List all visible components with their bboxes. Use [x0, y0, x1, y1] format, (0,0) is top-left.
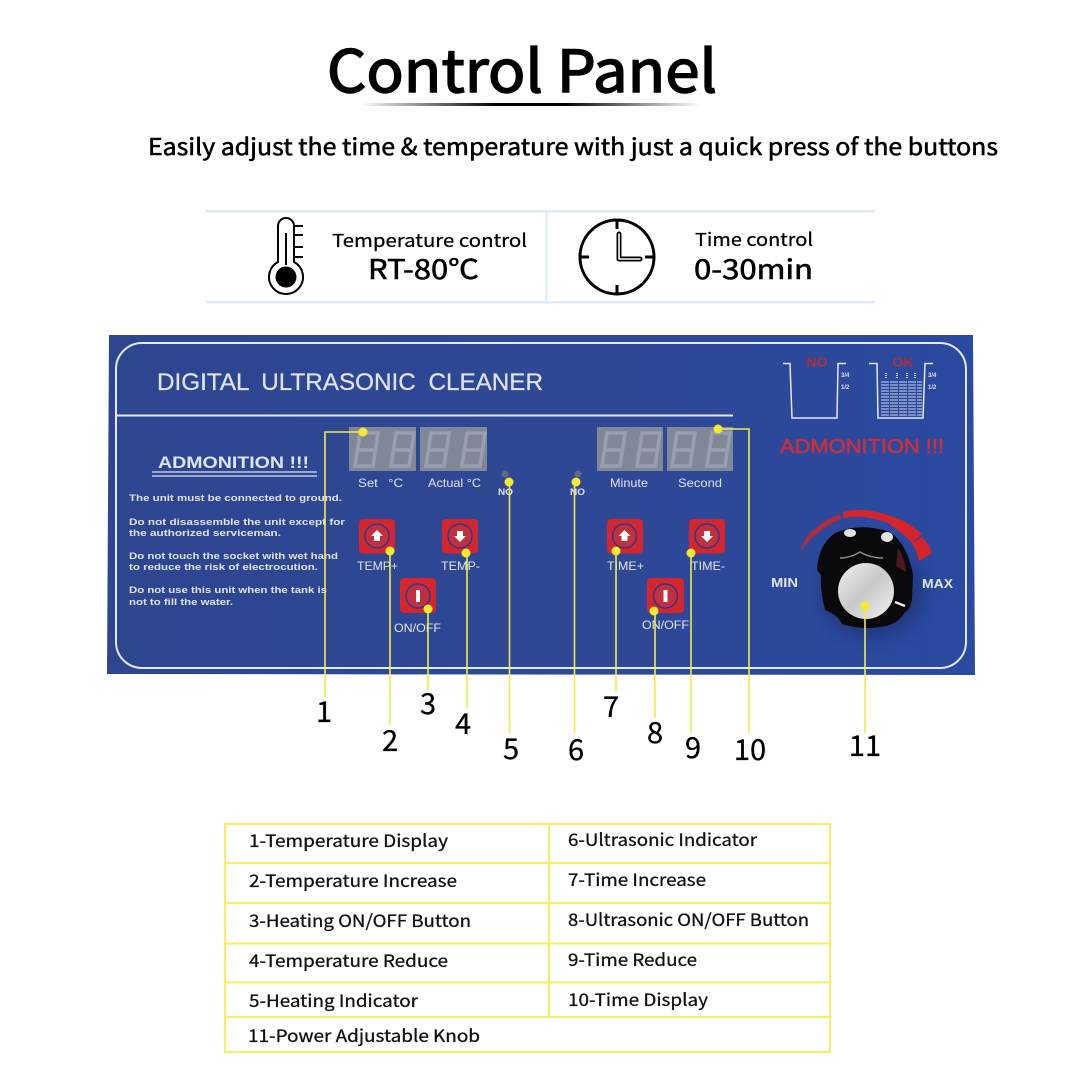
legend: left column: 1-Temperature Display [249, 827, 448, 852]
callout numbers: 4 [455, 701, 471, 743]
legend: left column: 11-Power Adjustable Knob [248, 1022, 480, 1047]
button: temp down [441, 519, 480, 573]
callout numbers: 10 [734, 727, 766, 769]
button: time up [607, 519, 644, 573]
subtitle: Easily adjust the time & temperature with just a quick press of the buttons [148, 128, 998, 162]
callout leader lines [325, 424, 870, 733]
ultrasonic indicator [570, 470, 585, 497]
legend: left column: 5-Heating Indicator [249, 987, 418, 1012]
legend table [225, 824, 830, 1052]
button: temp up: TEMP+ [357, 559, 398, 573]
legend: right column: 6-Ultrasonic Indicator [568, 826, 757, 851]
time display [597, 427, 733, 490]
legend: right column: 7-Time Increase [568, 866, 706, 891]
callout numbers: 3 [420, 681, 436, 723]
button: temp down: TEMP- [441, 559, 480, 573]
legend: left column: 2-Temperature Increase [249, 867, 457, 892]
power knob: MAX [922, 577, 954, 591]
legend: right column: 10-Time Display [568, 986, 708, 1011]
legend: left column [248, 827, 480, 1047]
power scale arc [800, 510, 932, 561]
admonition block: Do not disassemble the unit except for [129, 517, 345, 528]
legend: right column: 9-Time Reduce [568, 946, 697, 971]
time display: Second [678, 476, 722, 490]
legend: left column: 3-Heating ON/OFF Button [249, 907, 471, 932]
time display: Minute [610, 476, 648, 490]
heating indicator [498, 470, 513, 497]
callout numbers: 2 [382, 718, 398, 760]
callout numbers: 9 [685, 725, 701, 767]
admonition block: The unit must be connected to ground. [129, 493, 342, 504]
icon: tank no: 1/2 [841, 385, 850, 391]
power knob: MIN [771, 576, 798, 590]
temperature display: Actual °C [428, 476, 481, 490]
legend: right column [568, 826, 809, 1011]
admonition block: ADMONITION !!! [158, 453, 309, 472]
icon: tank no [783, 354, 850, 418]
text: temperature control [332, 227, 527, 287]
admonition block: to reduce the risk of electrocution. [129, 562, 318, 573]
temperature display: Set °C [358, 476, 403, 490]
title underline [360, 103, 700, 106]
title: Control Panel [327, 25, 717, 109]
admonition block: the authorized serviceman. [129, 528, 281, 539]
icon: tank ok: OK [892, 354, 914, 370]
button: heating on/off [394, 578, 441, 635]
legend: right column: 8-Ultrasonic ON/OFF Button [568, 906, 809, 931]
text: time control [694, 226, 813, 287]
icon: tank ok [869, 354, 937, 418]
icon: tank ok: 1/2 [928, 385, 937, 391]
button: temp up [357, 519, 398, 573]
knob shadow [820, 546, 924, 638]
callout numbers: 8 [647, 710, 663, 752]
callout numbers: 7 [603, 684, 619, 726]
button: ultrasonic on/off [642, 578, 689, 632]
callout numbers [316, 681, 881, 769]
text: time control: 0-30min [694, 248, 813, 287]
admonition block: Do not use this unit when the tank is [129, 585, 327, 596]
admonition block: Do not touch the socket with wet hand [129, 551, 338, 562]
panel: control panel photo [107, 335, 975, 675]
icon: tank no: 3/4 [841, 373, 850, 379]
button: time up: TIME+ [607, 559, 644, 573]
power knob [771, 510, 954, 638]
admonition block: not to fill the water. [129, 597, 233, 608]
text: temperature control: Temperature control [332, 227, 527, 253]
panel heading: DIGITAL ULTRASONIC CLEANER [157, 369, 543, 396]
legend: left column: 4-Temperature Reduce [249, 947, 448, 972]
button: time down [689, 519, 725, 573]
knob body [817, 527, 913, 628]
icon: tank no: NO [806, 354, 828, 370]
icon: tank ok: 3/4 [928, 373, 937, 379]
callout numbers: 6 [568, 727, 584, 769]
button: heating on/off: ON/OFF [394, 621, 441, 635]
specification strip [206, 210, 875, 304]
callout numbers: 1 [316, 689, 332, 731]
callout numbers: 5 [503, 726, 519, 768]
icon: thermometer [269, 218, 303, 294]
button: time down: TIME- [691, 559, 725, 573]
icon: clock [579, 219, 655, 295]
temperature display [349, 427, 487, 490]
callout numbers: 11 [849, 723, 881, 765]
text: time control: Time control [695, 226, 813, 252]
heating indicator: NO [498, 487, 513, 497]
admonition block [129, 453, 345, 608]
button: ultrasonic on/off: ON/OFF [642, 618, 689, 632]
red admonition: ADMONITION !!! [780, 435, 944, 458]
ultrasonic indicator: NO [570, 487, 585, 497]
text: temperature control: RT-80℃ [368, 248, 479, 287]
